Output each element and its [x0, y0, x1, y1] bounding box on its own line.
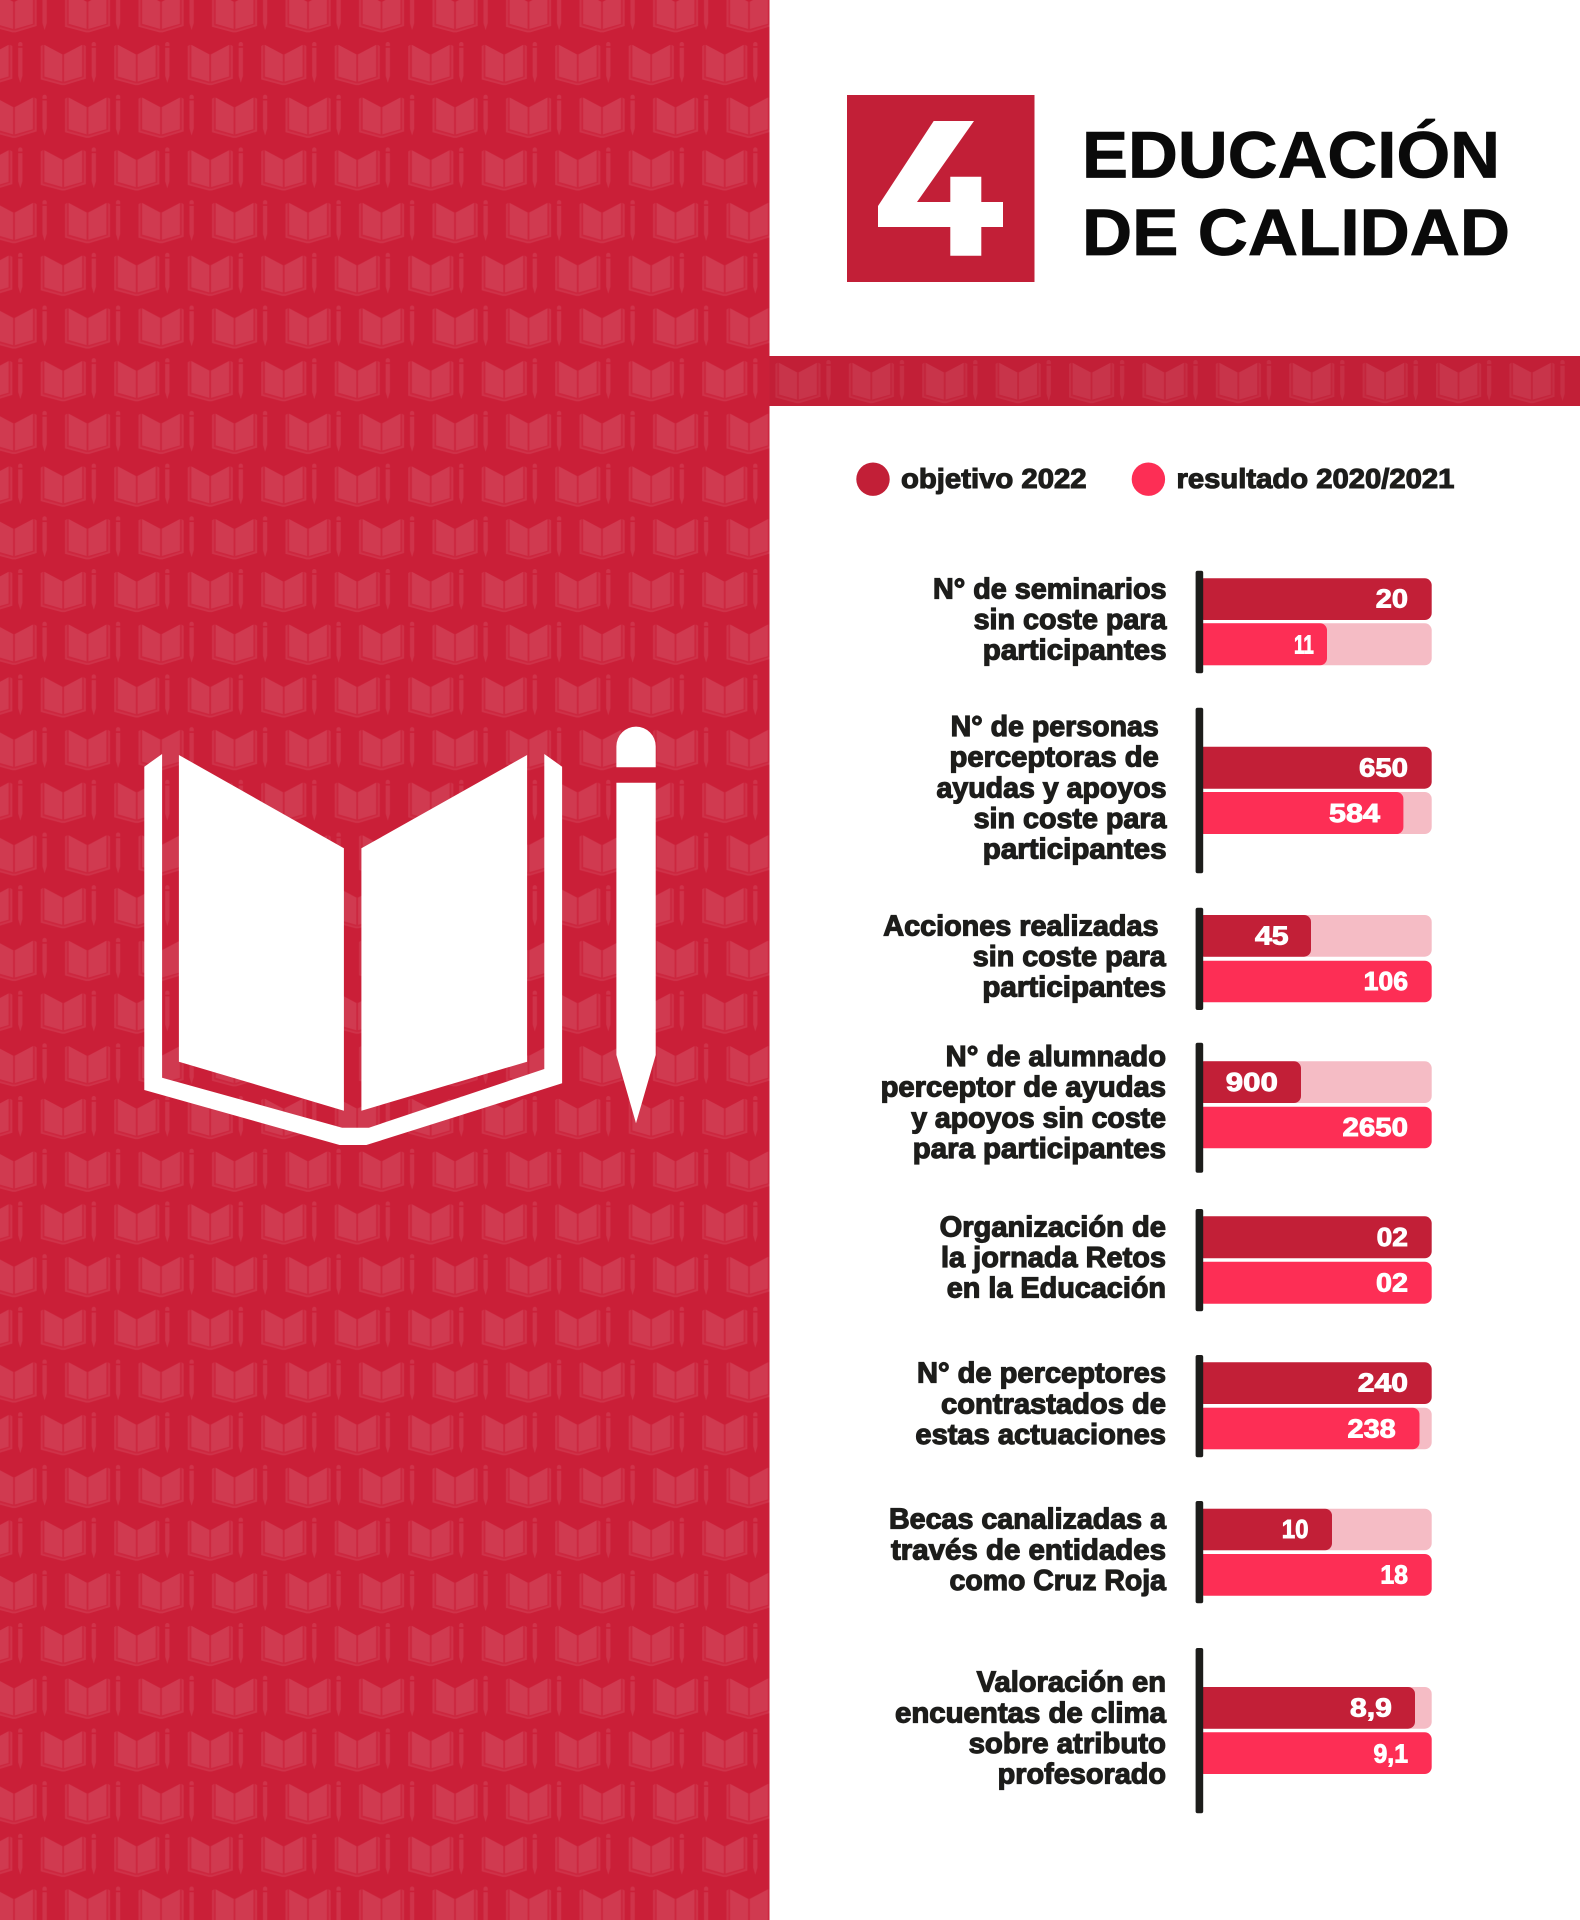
bar: resultado 106: [1197, 961, 1432, 1002]
bar: objetivo 8,9: [1197, 1687, 1432, 1729]
row: valoración profesorado: [895, 1648, 1432, 1813]
axis: [1196, 708, 1203, 873]
label: sin coste para: [974, 803, 1168, 835]
label: N° de perceptores: [917, 1358, 1166, 1390]
bar: objetivo 45: [1197, 915, 1432, 957]
bar: objetivo 900: 900: [1226, 1069, 1278, 1097]
bar: resultado 584: 584: [1329, 800, 1381, 828]
bar: resultado 02: [1197, 1262, 1432, 1304]
label: Organización de: [940, 1211, 1166, 1243]
label: contrastados de: [941, 1388, 1166, 1420]
bar: resultado 18: 18: [1380, 1561, 1408, 1589]
bar: objetivo 240: 240: [1358, 1370, 1408, 1398]
axis: [1196, 1043, 1203, 1173]
bar: objetivo 02: [1197, 1216, 1432, 1258]
bar: resultado 238: [1197, 1408, 1432, 1449]
label: [889, 1504, 1167, 1597]
axis: [1196, 1355, 1203, 1457]
bar: objetivo 20: [1197, 578, 1432, 620]
axis: [1196, 571, 1203, 673]
bar: objetivo 8,9: 8,9: [1350, 1695, 1392, 1723]
label: participantes: [983, 834, 1166, 866]
number badge: goal 4: [847, 95, 1034, 282]
legend item: resultado 2020/2021: resultado 2020/2021: [1176, 463, 1454, 494]
title: [1082, 117, 1510, 269]
row: alumnado perceptor: [881, 1041, 1432, 1173]
label: N° de personas: [951, 711, 1159, 743]
label: [881, 1041, 1166, 1165]
row: organización jornada: [940, 1209, 1432, 1311]
label: estas actuaciones: [915, 1419, 1166, 1451]
label: través de entidades: [891, 1534, 1166, 1566]
label: participantes: [983, 634, 1166, 666]
row: perceptores contrastados: [915, 1355, 1432, 1457]
label: encuentas de clima: [895, 1697, 1167, 1729]
axis: [1196, 908, 1203, 1010]
title: DE CALIDAD: [1082, 195, 1510, 269]
panel: left red background: [0, 0, 770, 1920]
bar: resultado 2650: 2650: [1342, 1114, 1408, 1142]
row: becas: [889, 1501, 1432, 1603]
legend item: objetivo 2022: objetivo 2022: [901, 463, 1087, 494]
label: Valoración en: [977, 1667, 1166, 1699]
label: [936, 711, 1168, 866]
label: [895, 1667, 1167, 1791]
label: N° de seminarios: [933, 573, 1166, 605]
bar: objetivo 10: [1197, 1509, 1432, 1550]
label: profesorado: [998, 1759, 1166, 1791]
label: para participantes: [913, 1133, 1166, 1165]
row: acciones realizadas: [883, 908, 1432, 1010]
label: y apoyos sin coste: [911, 1102, 1166, 1134]
bar: objetivo 20: 20: [1376, 586, 1408, 614]
axis: [1196, 1648, 1203, 1813]
axis: [1196, 1209, 1203, 1311]
icon: open book and pencil: [144, 727, 656, 1145]
bar: resultado 9,1: 9,1: [1374, 1740, 1408, 1768]
label: [915, 1358, 1166, 1451]
label: Becas canalizadas a: [889, 1504, 1167, 1536]
bar: objetivo 650: 650: [1359, 755, 1408, 783]
bar: resultado 584: [1197, 792, 1432, 834]
bar: resultado 11: 11: [1294, 631, 1314, 659]
label: [933, 573, 1168, 666]
bar: resultado 02: 02: [1376, 1269, 1408, 1297]
legend: [856, 462, 1454, 496]
bar: resultado 11: [1197, 623, 1432, 665]
title: EDUCACIÓN: [1082, 117, 1500, 191]
label: sin coste para: [973, 941, 1167, 973]
bar: resultado 2650: [1197, 1107, 1432, 1148]
axis: [1196, 1501, 1203, 1603]
bar: resultado 18: [1197, 1554, 1432, 1596]
label: Acciones realizadas: [883, 910, 1158, 942]
label: N° de alumnado: [946, 1041, 1166, 1073]
bar: objetivo 240: [1197, 1362, 1432, 1404]
label: perceptoras de: [950, 742, 1159, 774]
label: en la Educación: [947, 1273, 1166, 1305]
label: [940, 1211, 1166, 1305]
bar: objetivo 900: [1197, 1061, 1432, 1103]
bar: objetivo 10: 10: [1282, 1516, 1308, 1544]
label: [883, 910, 1167, 1004]
label: como Cruz Roja: [950, 1565, 1167, 1597]
band: red patterned divider: [770, 356, 1580, 406]
label: participantes: [982, 972, 1166, 1004]
background pattern: books and pencils: [0, 0, 770, 1920]
icon: pencil: [616, 727, 656, 1123]
bar: resultado 106: 106: [1364, 968, 1408, 996]
icon: book cover: [144, 754, 562, 1145]
icon: left page: [179, 755, 344, 1111]
bar: resultado 238: 238: [1348, 1415, 1396, 1443]
label: perceptor de ayudas: [881, 1072, 1166, 1104]
row: seminarios: [933, 571, 1432, 673]
bar: objetivo 45: 45: [1255, 922, 1289, 950]
bar: resultado 9,1: [1197, 1732, 1432, 1774]
label: sin coste para: [974, 604, 1168, 636]
label: la jornada Retos: [941, 1242, 1166, 1274]
row: personas perceptoras: [936, 708, 1432, 873]
bar: objetivo 650: [1197, 747, 1432, 789]
bar: objetivo 02: 02: [1377, 1224, 1408, 1252]
label: sobre atributo: [969, 1728, 1166, 1760]
icon: right page: [361, 755, 527, 1111]
label: ayudas y apoyos: [936, 772, 1166, 804]
